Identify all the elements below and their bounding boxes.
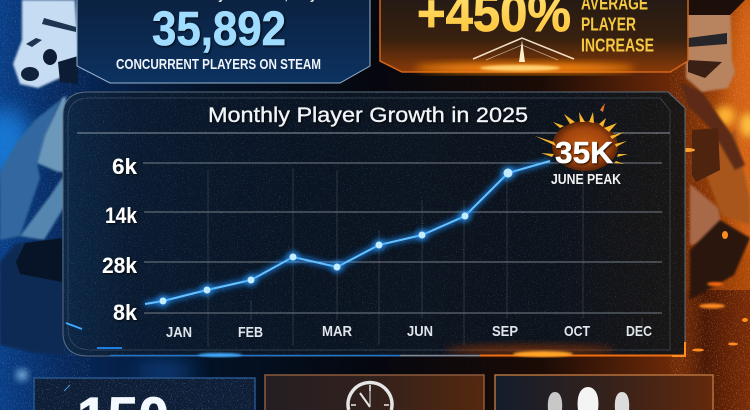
- panel: stat card players: [494, 374, 714, 410]
- soldier: right orange trooper: [680, 0, 750, 352]
- y-axis labels: 8k: [113, 300, 138, 325]
- line series: player growth: [145, 161, 550, 307]
- icon: winged chevron: [473, 38, 574, 62]
- soldier: left blue trooper: [0, 0, 78, 356]
- label: average player increase: [581, 0, 654, 56]
- y-axis labels: 28k: [102, 253, 138, 278]
- icon: clock: [348, 382, 392, 410]
- y-axis labels: [102, 154, 138, 325]
- panel: average player increase: [379, 0, 689, 76]
- x-axis labels: MAR: [322, 323, 352, 340]
- panel: stat card clock: [264, 374, 485, 410]
- label: average player increase: PLAYER: [581, 14, 636, 34]
- panel: monthly player growth chart: [62, 92, 686, 358]
- y-axis labels: 6k: [112, 154, 138, 179]
- spark: blue flare bottom left: [17, 370, 27, 380]
- x-axis labels: SEP: [492, 323, 518, 340]
- callout: 35K June peak: [535, 103, 628, 188]
- x-axis labels: JUN: [407, 323, 433, 340]
- grid lines: [143, 148, 662, 347]
- x-axis labels: DEC: [626, 323, 652, 340]
- label: average player increase: INCREASE: [581, 36, 654, 56]
- x-axis labels: JAN: [166, 324, 192, 341]
- icon: three player silhouettes: [548, 387, 629, 410]
- x-axis labels: FEB: [238, 324, 263, 341]
- callout: 35K June peak: JUNE PEAK: [551, 171, 621, 188]
- x-axis labels: OCT: [564, 323, 590, 340]
- callout: 35K June peak: 35K: [555, 135, 614, 170]
- icon: sun burst: [535, 103, 628, 171]
- panel: concurrent players: [76, 0, 370, 84]
- y-axis labels: 14k: [105, 203, 138, 228]
- chart title: Monthly Player Growth in 2025: [208, 104, 528, 127]
- panel: stat card 150: [33, 377, 256, 410]
- stat: 35,892: 35,892: [152, 3, 286, 56]
- x-axis labels: [166, 323, 652, 341]
